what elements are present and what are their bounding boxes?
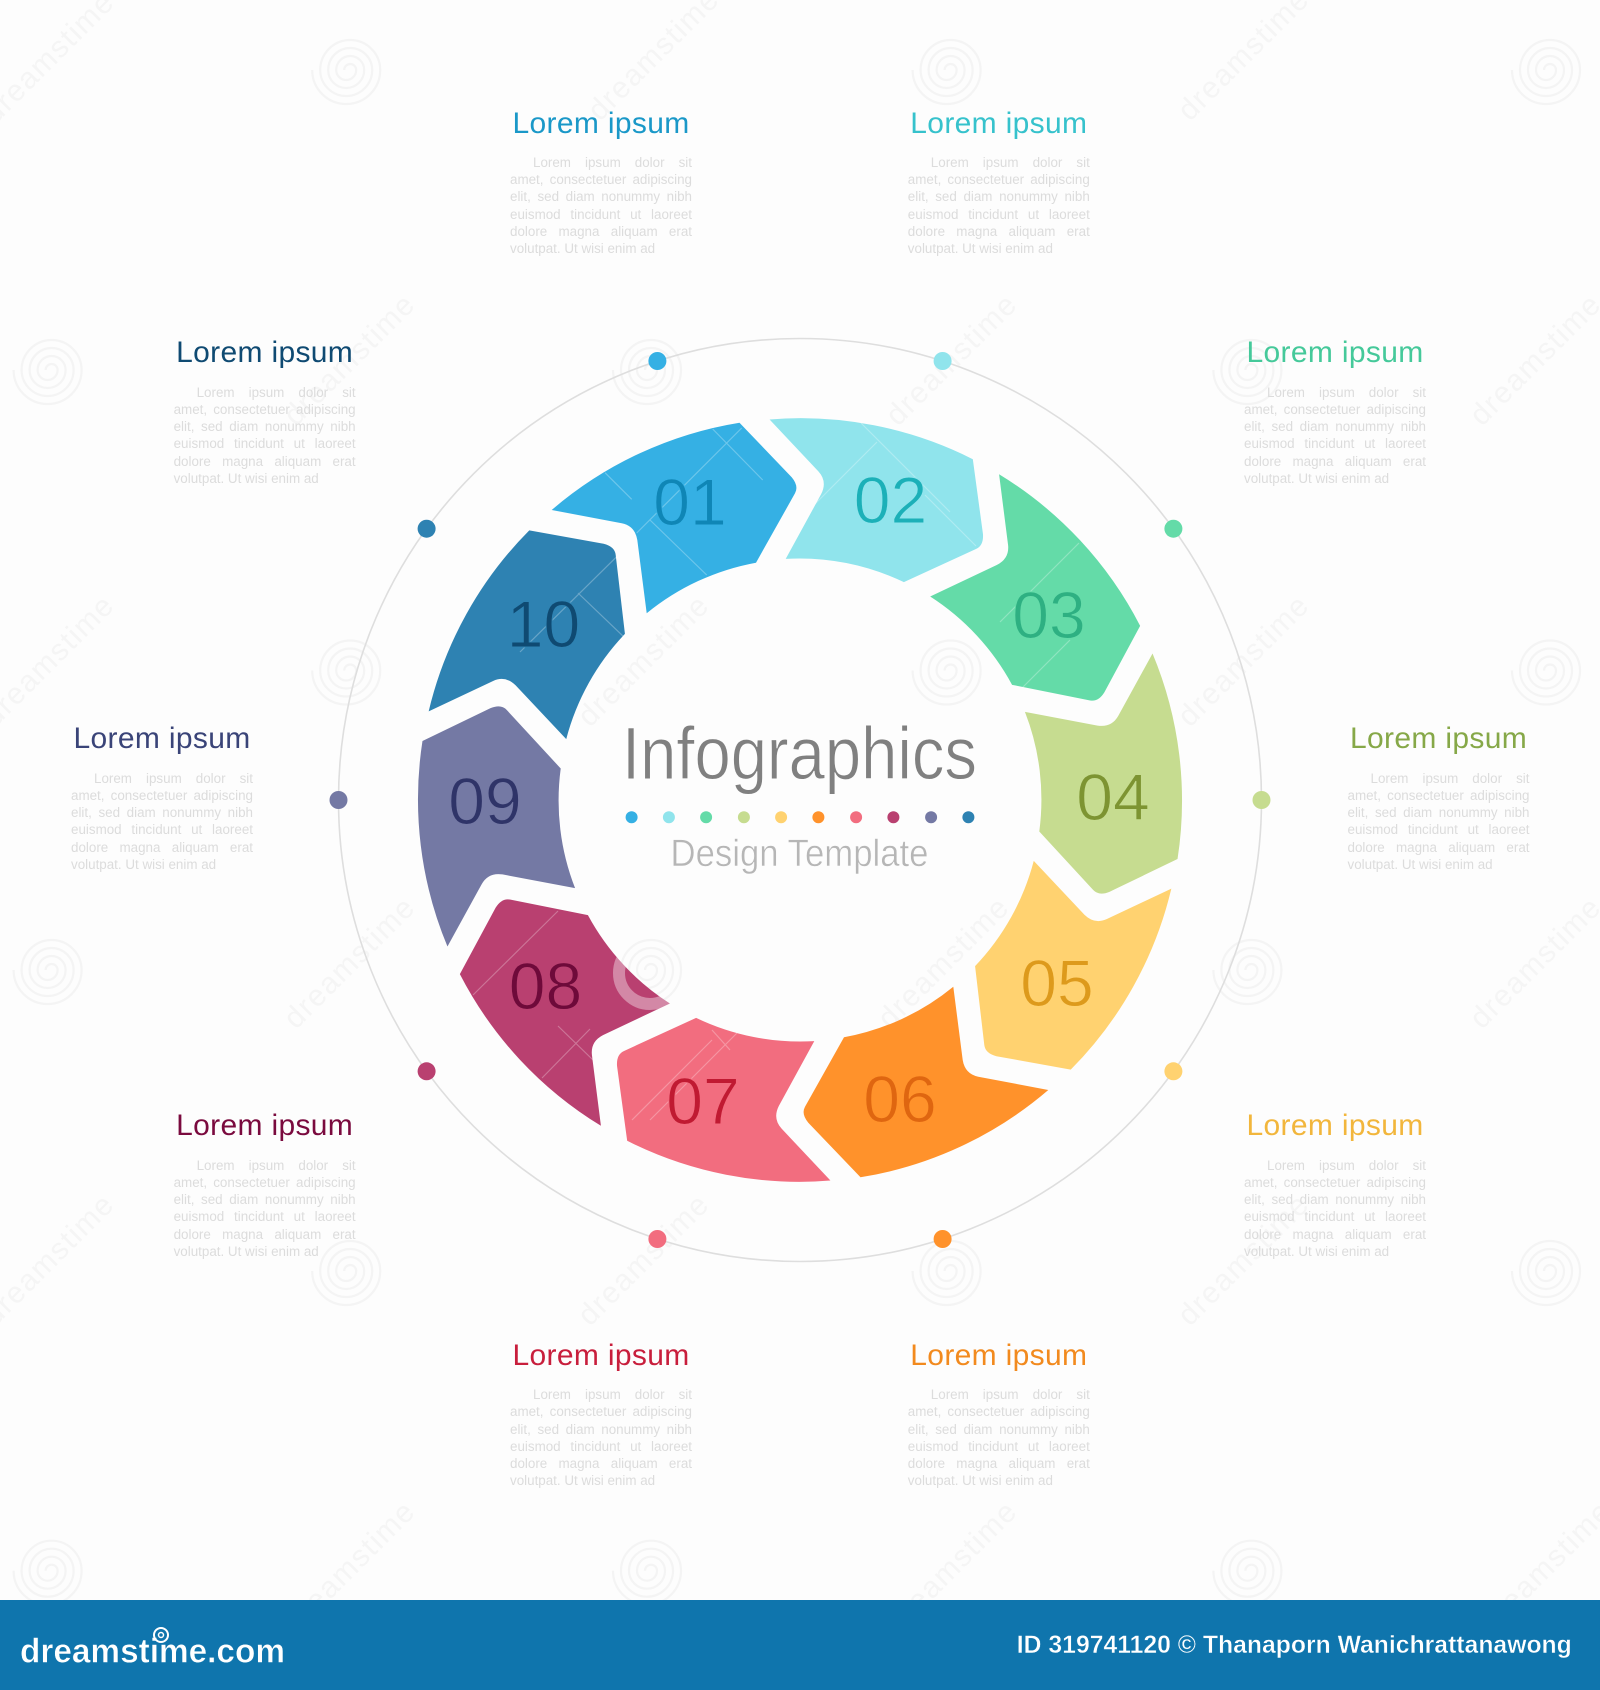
text block 10: elit, sed diam nonummy nibh	[174, 419, 356, 434]
text block 05	[1244, 1109, 1426, 1259]
text block 03: amet, consectetuer adipiscing	[1244, 402, 1426, 417]
text block 08: dolore magna aliquam erat	[174, 1227, 356, 1242]
text block 08: volutpat. Ut wisi enim ad	[174, 1244, 319, 1259]
text block 02	[908, 107, 1090, 256]
text block 05: amet, consectetuer adipiscing	[1244, 1175, 1426, 1190]
center dot row	[626, 811, 974, 823]
text block 02: euismod tincidunt ut laoreet	[908, 207, 1090, 222]
text block 07: Lorem ipsum dolor sit	[533, 1387, 692, 1402]
number 07: 07	[666, 1064, 740, 1138]
watermark wordmarks: dreamstime	[872, 892, 1015, 1035]
watermark wordmarks: dreamstime	[278, 289, 421, 432]
watermark wordmarks: dreamstime	[572, 1189, 715, 1332]
text block 07: Lorem ipsum	[512, 1339, 690, 1372]
number 01: 01	[653, 465, 727, 539]
text block 04: Lorem ipsum dolor sit	[1370, 771, 1530, 786]
text block 07: dolore magna aliquam erat	[510, 1456, 692, 1471]
text block 05: elit, sed diam nonummy nibh	[1244, 1192, 1426, 1207]
outer ring	[338, 338, 1262, 1262]
segment 06	[804, 987, 1048, 1177]
text block 04: Lorem ipsum	[1350, 722, 1527, 755]
segment 01	[552, 423, 796, 613]
watermark wordmarks: dreamstime	[278, 892, 421, 1035]
text block 01: volutpat. Ut wisi enim ad	[510, 241, 655, 256]
text block 06: euismod tincidunt ut laoreet	[908, 1439, 1090, 1454]
text block 08: euismod tincidunt ut laoreet	[174, 1209, 356, 1224]
text block 07: volutpat. Ut wisi enim ad	[510, 1473, 655, 1488]
text block 10: volutpat. Ut wisi enim ad	[174, 471, 319, 486]
text block 04: elit, sed diam nonummy nibh	[1348, 805, 1530, 820]
text block 01: dolore magna aliquam erat	[510, 224, 692, 239]
text block 02: Lorem ipsum	[910, 107, 1087, 140]
text block 04: euismod tincidunt ut laoreet	[1348, 822, 1530, 837]
text block 03: Lorem ipsum	[1246, 336, 1424, 369]
text block 02: dolore magna aliquam erat	[908, 224, 1090, 239]
text block 08: elit, sed diam nonummy nibh	[174, 1192, 356, 1207]
text block 02: Lorem ipsum dolor sit	[931, 155, 1090, 170]
text block 09: amet, consectetuer adipiscing	[71, 788, 253, 803]
text block 10: Lorem ipsum dolor sit	[197, 385, 356, 400]
text block 09: volutpat. Ut wisi enim ad	[71, 857, 216, 872]
text block 08: Lorem ipsum dolor sit	[197, 1158, 356, 1173]
text block 09	[71, 722, 253, 872]
number 04: 04	[1076, 760, 1150, 834]
center title: Infographics	[622, 712, 977, 795]
watermark over segments	[473, 423, 1130, 1120]
text block 04: amet, consectetuer adipiscing	[1348, 788, 1530, 803]
text block 04	[1348, 722, 1530, 872]
text block 06: Lorem ipsum	[910, 1339, 1087, 1372]
text block 10: Lorem ipsum	[176, 336, 353, 369]
ring dots	[330, 352, 1270, 1248]
text block 09: Lorem ipsum	[74, 722, 251, 755]
text block 09: dolore magna aliquam erat	[71, 840, 253, 855]
segment 07	[581, 953, 891, 1251]
text block 10: dolore magna aliquam erat	[174, 454, 356, 469]
segment 04	[979, 622, 1236, 913]
segment 02	[709, 349, 1019, 647]
segment 03	[901, 447, 1158, 739]
segment 10	[377, 497, 687, 795]
text block 09: euismod tincidunt ut laoreet	[71, 822, 253, 837]
text block 03	[1244, 336, 1426, 486]
text block 01: amet, consectetuer adipiscing	[510, 172, 692, 187]
text block 02: volutpat. Ut wisi enim ad	[908, 241, 1053, 256]
text block 06: Lorem ipsum dolor sit	[931, 1387, 1090, 1402]
text block 08: amet, consectetuer adipiscing	[174, 1175, 356, 1190]
text block 08: Lorem ipsum	[176, 1109, 353, 1142]
center subtitle: Design Template	[670, 833, 928, 875]
text block 10: amet, consectetuer adipiscing	[174, 402, 356, 417]
text block 07: euismod tincidunt ut laoreet	[510, 1439, 692, 1454]
text block 01: Lorem ipsum dolor sit	[533, 155, 692, 170]
segment 05	[913, 805, 1223, 1103]
text block 09: elit, sed diam nonummy nibh	[71, 805, 253, 820]
text block 03: dolore magna aliquam erat	[1244, 454, 1426, 469]
text block 06: volutpat. Ut wisi enim ad	[908, 1473, 1053, 1488]
text block 10	[174, 336, 356, 486]
watermark wordmarks: dreamstime	[880, 289, 1023, 432]
watermark wordmarks: dreamstime	[1172, 1189, 1315, 1332]
text block 08	[174, 1109, 356, 1259]
footer logo: dreamstime.com	[20, 1633, 285, 1671]
text block 03: elit, sed diam nonummy nibh	[1244, 419, 1426, 434]
number 02: 02	[854, 463, 927, 537]
number 06: 06	[863, 1062, 937, 1136]
text block 07	[510, 1339, 692, 1488]
text block 05: euismod tincidunt ut laoreet	[1244, 1209, 1426, 1224]
text block 01	[510, 107, 692, 256]
number 10: 10	[507, 587, 580, 661]
number 08: 08	[509, 949, 582, 1023]
text block 07: amet, consectetuer adipiscing	[510, 1404, 692, 1419]
text block 09: Lorem ipsum dolor sit	[94, 771, 253, 786]
text block 03: volutpat. Ut wisi enim ad	[1244, 471, 1389, 486]
text block 03: euismod tincidunt ut laoreet	[1244, 436, 1426, 451]
text block 01: Lorem ipsum	[512, 107, 690, 140]
text block 05: volutpat. Ut wisi enim ad	[1244, 1244, 1389, 1259]
watermark wordmarks: dreamstime	[1172, 590, 1315, 733]
text block 05: Lorem ipsum dolor sit	[1267, 1158, 1426, 1173]
number 05: 05	[1020, 946, 1094, 1020]
text block 01: elit, sed diam nonummy nibh	[510, 189, 692, 204]
segment 08	[442, 861, 699, 1153]
number 09: 09	[448, 764, 522, 838]
text block 03: Lorem ipsum dolor sit	[1267, 385, 1426, 400]
text block 04: volutpat. Ut wisi enim ad	[1348, 857, 1493, 872]
footer credit: ID 319741120 © Thanaporn Wanichrattanawong	[1017, 1631, 1572, 1659]
text block 10: euismod tincidunt ut laoreet	[174, 436, 356, 451]
text block 04: dolore magna aliquam erat	[1348, 840, 1530, 855]
text block 06: elit, sed diam nonummy nibh	[908, 1422, 1090, 1437]
text block 02: elit, sed diam nonummy nibh	[908, 189, 1090, 204]
text block 06: dolore magna aliquam erat	[908, 1456, 1090, 1471]
watermark wordmarks: dreamstime	[572, 590, 715, 733]
text block 05: dolore magna aliquam erat	[1244, 1227, 1426, 1242]
footer bar	[0, 1600, 1600, 1690]
text block 01: euismod tincidunt ut laoreet	[510, 207, 692, 222]
segment 09	[364, 687, 621, 978]
text block 06	[908, 1339, 1090, 1488]
text block 07: elit, sed diam nonummy nibh	[510, 1422, 692, 1437]
text block 06: amet, consectetuer adipiscing	[908, 1404, 1090, 1419]
text block 02: amet, consectetuer adipiscing	[908, 172, 1090, 187]
text block 05: Lorem ipsum	[1246, 1109, 1424, 1142]
number 03: 03	[1012, 578, 1086, 652]
